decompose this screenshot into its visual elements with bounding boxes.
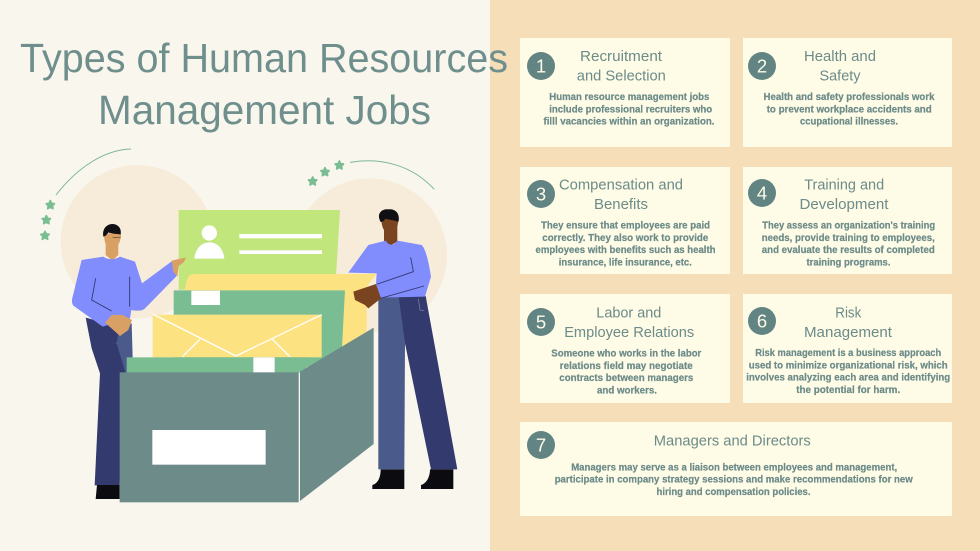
body: Managers may serve as a liaison between employees and management, — [571, 462, 897, 473]
number badge 1 — [527, 52, 555, 80]
body: correctly. They also work to provide — [542, 233, 709, 244]
front folder strip — [127, 357, 307, 373]
body — [764, 92, 935, 128]
heading: Management — [804, 324, 893, 341]
body: contracts between managers — [559, 373, 694, 384]
heading — [800, 176, 889, 213]
heading: and Selection — [577, 68, 666, 84]
body — [762, 221, 935, 268]
body: relations field may negotiate — [560, 361, 693, 372]
body — [544, 92, 715, 128]
card 1: Recruitment and Selection — [520, 38, 730, 147]
yellow folder — [185, 274, 377, 370]
heading: Risk — [835, 304, 862, 321]
body — [746, 348, 950, 396]
card 4: Training and Development — [743, 167, 952, 274]
number badge 2 — [748, 52, 776, 80]
body: They ensure that employees are paid — [541, 221, 710, 232]
body: and evaluate the results of completed — [762, 245, 935, 256]
heading: Benefits — [594, 196, 648, 213]
body — [555, 462, 913, 498]
card 2: Health and Safety — [743, 38, 952, 147]
heading: Health and — [804, 48, 876, 65]
title: Types of Human Resources — [20, 35, 508, 81]
background circles — [61, 165, 447, 332]
body: insurance, life insurance, etc. — [559, 258, 692, 268]
body: employees with benefits such as health — [536, 245, 716, 256]
body — [551, 349, 701, 396]
number badge 3: 3 — [536, 184, 546, 204]
heading — [564, 304, 694, 341]
number badge 2: 2 — [757, 56, 767, 76]
number badge 4: 4 — [757, 182, 767, 204]
profile card — [179, 210, 340, 290]
number badge 7 — [527, 431, 555, 459]
body: and workers. — [597, 385, 657, 396]
heading — [804, 304, 893, 341]
body: ccupational illnesses. — [800, 117, 898, 128]
heading: Compensation and — [559, 176, 683, 193]
heading: Development — [800, 196, 889, 213]
body: Someone who works in the labor — [551, 349, 701, 360]
heading: Employee Relations — [564, 324, 694, 341]
stars — [41, 161, 343, 239]
heading: Recruitment — [580, 48, 663, 65]
body: used to minimize organizational risk, which — [749, 360, 948, 371]
body: They assess an organization's training — [762, 221, 935, 232]
envelope — [153, 314, 322, 357]
storage box — [120, 328, 374, 502]
card 7: Managers and Directors — [520, 422, 952, 516]
illustration: two people filing documents into a box — [41, 149, 457, 502]
number badge 3 — [527, 180, 555, 208]
body: Risk management is a business approach — [755, 348, 941, 359]
cream patch behind envelope — [132, 320, 155, 357]
number badge 1: 1 — [536, 56, 546, 76]
body: needs, provide training to employees, — [762, 233, 935, 244]
title — [20, 35, 508, 133]
left person upper body — [72, 224, 186, 336]
body: include professional recruiters who — [549, 104, 712, 115]
heading: Labor and — [596, 304, 661, 321]
body — [536, 221, 716, 268]
card 5: Labor and Employee Relations — [520, 294, 730, 403]
body: hiring and compensation policies. — [656, 487, 811, 498]
body: the potential for harm. — [796, 385, 900, 396]
number badge 4 — [748, 179, 776, 207]
body: filll vacancies within an organization. — [544, 117, 715, 128]
body: to prevent workplace accidents and — [767, 104, 932, 115]
heading — [804, 48, 876, 84]
heading: Managers and Directors — [654, 432, 811, 449]
right person — [348, 209, 457, 489]
body: training programs. — [806, 258, 891, 268]
green folder — [174, 290, 345, 367]
title: Management Jobs — [98, 87, 431, 133]
body: Human resource management jobs — [549, 92, 710, 103]
heading: Training and — [804, 176, 884, 193]
body: involves analyzing each area and identifying — [746, 373, 950, 384]
number badge 5 — [527, 308, 555, 336]
body: Health and safety professionals work — [764, 92, 935, 103]
heading — [577, 48, 666, 84]
decorative arcs — [56, 149, 434, 195]
heading — [559, 176, 683, 213]
number badge 7: 7 — [536, 434, 546, 456]
card 6: Risk Management — [743, 294, 952, 403]
number badge 6: 6 — [757, 310, 767, 332]
body: participate in company strategy sessions and make recommendations for new — [555, 474, 913, 486]
heading: Safety — [820, 68, 861, 84]
number badge 5: 5 — [536, 312, 546, 332]
left person legs — [86, 318, 133, 499]
card 3: Compensation and Benefits — [520, 167, 730, 274]
number badge 6 — [748, 307, 776, 335]
